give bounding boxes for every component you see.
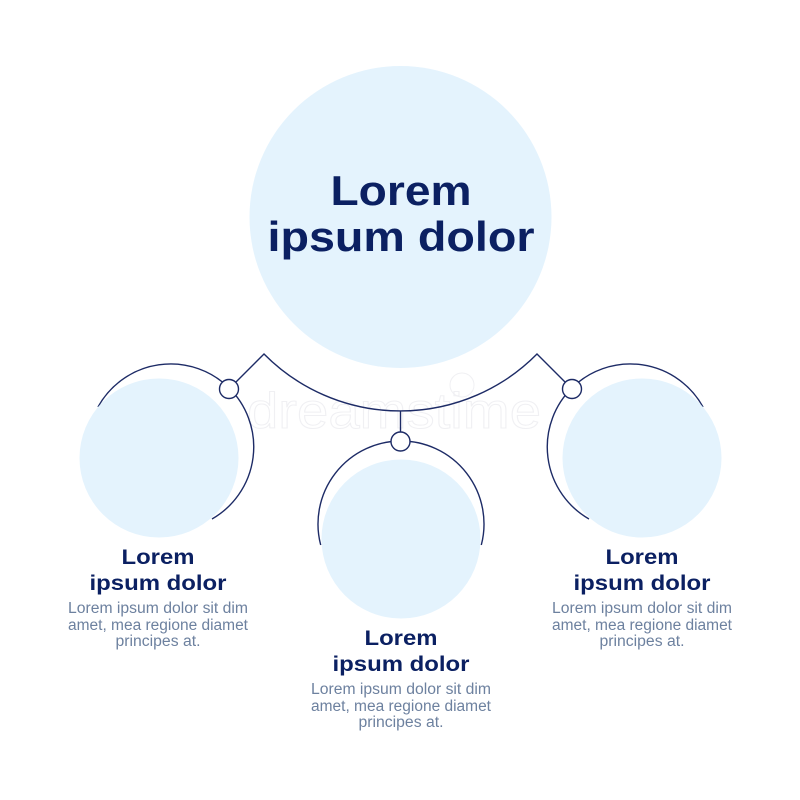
main heading: ipsum dolor: [268, 213, 534, 260]
right outline arc: [547, 364, 703, 519]
panel: middle item: [311, 432, 492, 731]
left body text: principes at.: [116, 633, 200, 650]
watermark: dreamstime: [247, 383, 541, 439]
right node: [562, 380, 582, 398]
left heading: Lorem: [122, 546, 194, 569]
right body text: Lorem ipsum dolor sit dim: [552, 600, 732, 617]
right filled circle: [562, 378, 722, 538]
left body text: amet, mea regione diamet: [68, 617, 249, 634]
connector: main arc with branches: [236, 354, 565, 432]
left outline arc: [98, 364, 254, 519]
middle body text: amet, mea regione diamet: [311, 698, 492, 715]
right heading: ipsum dolor: [574, 572, 710, 595]
panel: right item: [547, 364, 733, 650]
left filled circle: [80, 378, 238, 538]
middle node: [391, 432, 410, 451]
middle body text: Lorem ipsum dolor sit dim: [311, 681, 491, 698]
right body text: principes at.: [600, 633, 684, 650]
panel: left item: [68, 364, 254, 650]
left node: [220, 380, 238, 398]
middle outline arc: [318, 441, 484, 545]
middle filled circle: [322, 460, 480, 618]
right heading: Lorem: [606, 546, 678, 569]
middle body text: principes at.: [358, 714, 444, 731]
main circle: [250, 66, 552, 368]
middle heading: Lorem: [364, 627, 438, 650]
left heading: ipsum dolor: [90, 572, 226, 595]
middle heading: ipsum dolor: [332, 653, 470, 676]
main heading: Lorem: [330, 167, 472, 214]
left body text: Lorem ipsum dolor sit dim: [68, 600, 248, 617]
right body text: amet, mea regione diamet: [552, 617, 733, 634]
